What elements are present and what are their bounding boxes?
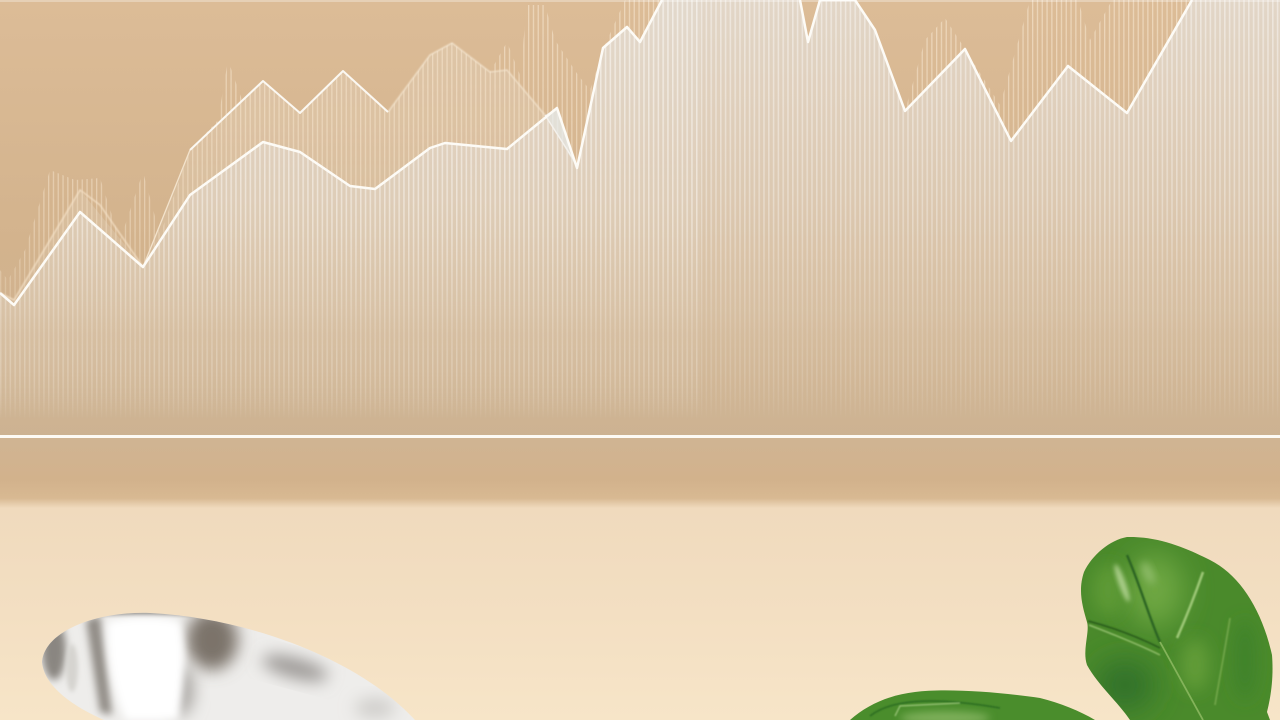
icon: metal bowl bbox=[40, 608, 416, 720]
second series return stroke bbox=[545, 115, 577, 165]
top edge highlight bbox=[0, 0, 1280, 2]
back series area bbox=[0, 0, 1192, 436]
second series lead-in bbox=[143, 150, 190, 267]
main series line, right part bbox=[800, 0, 1192, 141]
area chart bbox=[0, 0, 1280, 438]
lower basil leaf bbox=[848, 688, 1098, 720]
table surface bbox=[0, 508, 1280, 720]
chart baseline bbox=[0, 435, 1280, 438]
front series area bbox=[0, 0, 1280, 436]
back series faint line, centre bbox=[388, 43, 545, 115]
upper basil leaf bbox=[1080, 535, 1274, 720]
back series faint envelope line bbox=[0, 190, 143, 300]
lower wall band bbox=[0, 438, 1280, 508]
main series line, left part bbox=[0, 0, 662, 305]
crossing sliver bbox=[545, 108, 577, 168]
front series hairlines bbox=[0, 0, 1280, 436]
wall background bbox=[0, 0, 1280, 438]
icon: basil leaves bbox=[848, 535, 1274, 720]
second series line bbox=[190, 71, 388, 150]
